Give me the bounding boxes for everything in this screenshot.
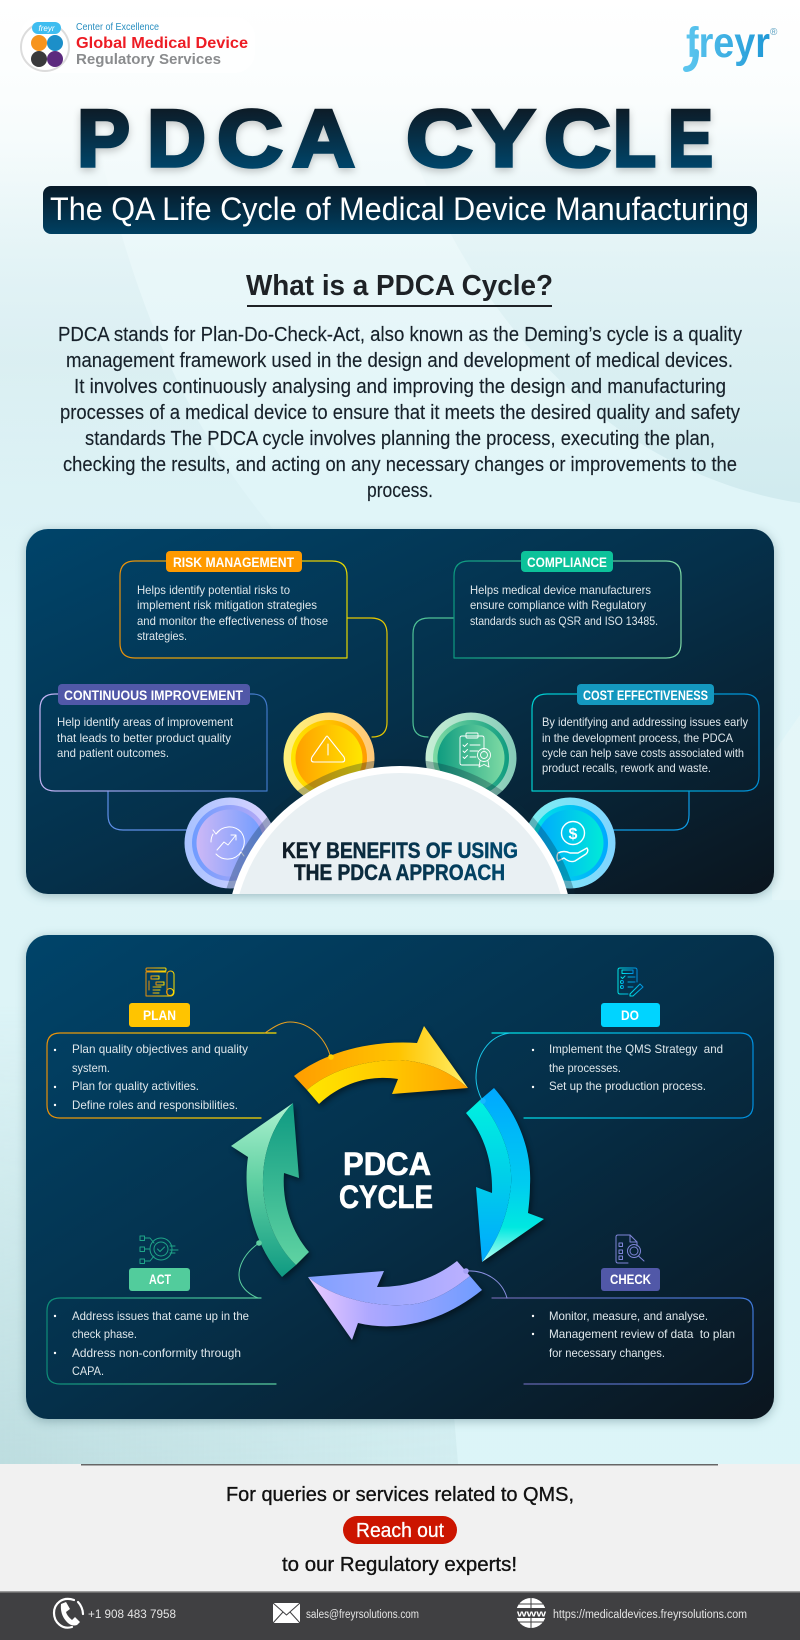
card: cost effectiveness: cycle can help save costs associated with [542, 746, 744, 760]
logo: Center of Excellence: freyr [38, 24, 55, 33]
logo: freyr: ® [770, 27, 778, 38]
step: plan: PLAN [143, 1008, 176, 1023]
arrow: act (green) [231, 1103, 309, 1277]
card: cost effectiveness: product recalls, rework and waste. [542, 761, 711, 775]
logo: freyr: freyr [686, 19, 770, 67]
card: compliance: ensure compliance with Regulatory [470, 598, 646, 612]
icon: plan blueprint [146, 968, 174, 996]
button: reach out [343, 1516, 457, 1544]
icon: compliance medallion [426, 712, 516, 804]
card: compliance: Helps medical device manufacturers [470, 583, 651, 597]
intro paragraph: PDCA stands for Plan-Do-Check-Act, also known as the Deming’s cycle is a quality [58, 324, 742, 346]
step: check: Management review of data to plan [549, 1327, 735, 1341]
call to action [0, 1464, 800, 1592]
card: continuous improvement: CONTINUOUS IMPROVEMENT [64, 688, 244, 703]
step: act: Address issues that came up in the [72, 1309, 249, 1323]
logo: Center of Excellence: Global Medical Device [76, 35, 248, 52]
arch: key benefits heading: THE PDCA APPROACH [294, 860, 505, 885]
card: cost effectiveness: By identifying and addressing issues early [542, 715, 748, 729]
icon: act target circuit [140, 1236, 178, 1264]
step: act: check phase. [72, 1327, 137, 1341]
step: act: ACT [149, 1272, 172, 1287]
intro paragraph: processes of a medical device to ensure that it meets the desired quality and safety [60, 402, 740, 424]
arrow: check (purple) [308, 1261, 482, 1340]
step: check [463, 1235, 753, 1384]
card: risk management: implement risk mitigation strategies [137, 598, 317, 612]
contact bar: https://medicaldevices.freyrsolutions.com [553, 1609, 747, 1621]
card: compliance: COMPLIANCE [527, 555, 607, 570]
center label: PDCA [343, 1146, 431, 1182]
icon: phone [54, 1599, 83, 1628]
arch: key benefits heading: KEY BENEFITS OF USING [282, 838, 518, 863]
card: cost effectiveness: in the development process, the PDCA [542, 731, 733, 745]
contact bar [0, 1591, 800, 1640]
step: act [47, 1236, 276, 1384]
heading: What is a PDCA Cycle?: What is a PDCA Cycle? [246, 270, 553, 302]
step: act: CAPA. [72, 1364, 104, 1378]
step: do: the processes. [549, 1061, 621, 1075]
logo: Center of Excellence: Center of Excellence [76, 21, 159, 33]
step: check: for necessary changes. [549, 1346, 665, 1360]
step: do: DO [621, 1008, 639, 1023]
intro paragraph: It involves continuously analysing and improving the design and manufacturing [74, 376, 726, 398]
logo: Center of Excellence [20, 17, 255, 73]
panel: key benefits [20, 526, 780, 902]
subtitle band: The QA Life Cycle of Medical Device Manufacturing [50, 191, 749, 227]
icon: cost medallion [524, 798, 616, 888]
title: L [613, 94, 656, 184]
intro paragraph: checking the results, and acting on any necessary changes or improvements to the [63, 454, 737, 476]
connector: continuous improvement [108, 791, 190, 830]
step: check: CHECK [610, 1272, 651, 1287]
icon: mail [273, 1603, 300, 1623]
call to action: to our Regulatory experts! [282, 1554, 517, 1576]
title: P [77, 94, 130, 184]
center label: CYCLE [339, 1179, 433, 1215]
step: do: Implement the QMS Strategy and [549, 1042, 723, 1056]
title: C [406, 94, 473, 184]
step: do [476, 968, 753, 1118]
center label [339, 1146, 433, 1215]
card: risk management: and monitor the effectiveness of those [137, 614, 328, 628]
arrow: plan (yellow) [294, 1026, 468, 1104]
arrow: do (blue) [466, 1088, 544, 1262]
icon: continuous improvement medallion [184, 798, 276, 888]
connector: compliance [413, 618, 454, 737]
card: compliance: standards such as QSR and ISO 13485. [470, 614, 658, 628]
icon: web globe [516, 1598, 547, 1628]
intro paragraph: management framework used in the design and development of medical devices. [66, 350, 733, 372]
title: C [544, 94, 611, 184]
intro paragraph [58, 324, 742, 502]
card: continuous improvement [40, 684, 267, 791]
connector: risk management [347, 618, 387, 737]
step: plan [47, 968, 334, 1118]
step: plan: Plan quality objectives and quality [72, 1042, 248, 1056]
call to action: For queries or services related to QMS, [226, 1484, 574, 1506]
icon: web globe: www [516, 1608, 547, 1620]
card: compliance [454, 551, 681, 658]
step: plan: Plan for quality activities. [72, 1079, 199, 1093]
title: A [292, 94, 355, 184]
title: C [217, 94, 283, 184]
contact bar: sales@freyrsolutions.com [306, 1609, 419, 1621]
step: do: Set up the production process. [549, 1079, 706, 1093]
card: risk management: strategies. [137, 629, 187, 643]
intro paragraph: standards The PDCA cycle involves planning the process, executing the plan, [85, 428, 715, 450]
card: continuous improvement: and patient outcomes. [57, 746, 169, 760]
title: Y [473, 94, 535, 184]
step: plan: Define roles and responsibilities. [72, 1098, 238, 1112]
card: risk management: Helps identify potential risks to [137, 583, 290, 597]
arch: key benefits heading [226, 760, 574, 894]
card: cost effectiveness [532, 684, 759, 791]
step: check: Monitor, measure, and analyse. [549, 1309, 708, 1323]
icon: check document magnifier [616, 1235, 644, 1263]
button: reach out: Reach out [356, 1520, 444, 1542]
logo: Center of Excellence: Regulatory Services [76, 51, 221, 68]
card: continuous improvement: Help identify areas of improvement [57, 715, 234, 729]
step: plan: system. [72, 1061, 110, 1075]
contact bar: +1 908 483 7958 [88, 1609, 176, 1621]
icon: do checklist [618, 968, 643, 996]
icon: cost medallion: $ [569, 826, 578, 843]
step: act: Address non-conformity through [72, 1346, 241, 1360]
connector: cost effectiveness [610, 791, 689, 830]
card: continuous improvement: that leads to better product quality [57, 731, 231, 745]
intro paragraph: process. [367, 480, 433, 502]
panel: PDCA cycle [26, 935, 774, 1419]
title [77, 94, 713, 184]
card: risk management: RISK MANAGEMENT [173, 555, 295, 570]
title: E [668, 94, 713, 184]
title: D [147, 94, 206, 184]
card: risk management [120, 551, 347, 658]
card: cost effectiveness: COST EFFECTIVENESS [583, 688, 708, 703]
icon: warning medallion [284, 712, 374, 804]
